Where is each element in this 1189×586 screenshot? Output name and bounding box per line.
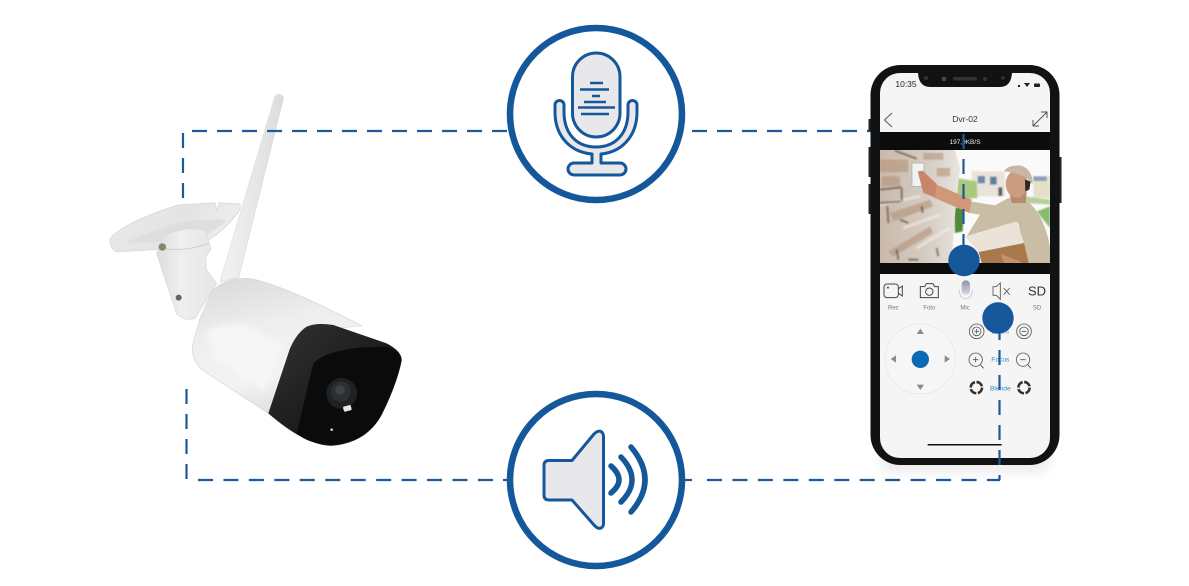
smartphone	[868, 65, 1062, 480]
neck	[1009, 191, 1027, 203]
face	[1006, 170, 1028, 198]
dashed connector lines	[183, 131, 1000, 480]
icon: record	[884, 284, 902, 298]
garden greenery	[954, 178, 1050, 233]
infrared dot	[330, 428, 333, 431]
SD label: SD	[1028, 284, 1046, 299]
camera bracket	[110, 203, 240, 319]
fullscreen icon	[1033, 112, 1047, 126]
icon: microphone	[555, 53, 637, 175]
icon: speaker	[544, 431, 645, 528]
video photo: delivery man at door	[880, 150, 1050, 263]
blue marker on controls	[982, 302, 1014, 334]
control labels: Focus	[991, 357, 1010, 364]
zoom buttons	[969, 324, 1031, 339]
phone shadow	[880, 450, 1050, 472]
app back arrow	[884, 113, 892, 127]
mounting plate	[110, 203, 240, 252]
aperture buttons	[971, 382, 1030, 393]
control labels: Blende	[990, 385, 1011, 392]
blue marker on video	[948, 245, 980, 276]
plate underside	[125, 219, 227, 243]
icon: photo	[920, 284, 938, 298]
speaker badge	[510, 394, 682, 566]
phone frame	[870, 65, 1060, 465]
bracket screw top	[158, 243, 166, 251]
microphone badge	[510, 28, 682, 200]
security camera photo	[110, 94, 402, 446]
phone dashed line vertical top	[962, 134, 965, 250]
app title: Dvr-02	[952, 114, 978, 124]
arm	[933, 184, 972, 213]
focus buttons	[969, 353, 1031, 368]
bracket neck	[157, 229, 217, 319]
side buttons	[868, 119, 1062, 214]
shirt	[966, 198, 1050, 263]
body highlight	[207, 324, 283, 392]
bracket screw lower	[176, 295, 182, 301]
status bar icons	[1018, 83, 1040, 87]
icon captions: Mic	[960, 306, 970, 312]
icon: muted speaker	[993, 283, 1010, 299]
icon captions: Foto	[923, 306, 936, 312]
hair	[1025, 180, 1031, 191]
control labels: Zoom	[992, 329, 1009, 336]
status bar time: 10:35	[895, 79, 917, 89]
control labels	[990, 329, 1011, 392]
phone dashed line vertical bottom	[998, 325, 1001, 480]
notch	[918, 73, 1012, 87]
speed readout: 197,9KB/S	[949, 139, 981, 146]
camera antenna	[220, 94, 284, 282]
camera lens	[326, 378, 357, 412]
parcel box	[965, 221, 1029, 263]
infographic canvas	[110, 24, 1062, 570]
home indicator	[928, 444, 1002, 445]
camera body	[192, 278, 362, 413]
cap	[1004, 165, 1033, 184]
neck collar line	[158, 243, 209, 250]
icon captions: Rec	[888, 306, 899, 312]
hand	[918, 171, 937, 197]
icon captions	[888, 306, 1042, 312]
distant houses	[972, 171, 1050, 198]
icon: mic active	[959, 280, 973, 299]
phone screen	[880, 73, 1050, 458]
joystick	[885, 324, 955, 394]
icon captions: SD	[1033, 306, 1042, 312]
video black band	[880, 132, 1050, 274]
camera black front housing	[268, 324, 402, 446]
door bell plate	[912, 163, 924, 186]
camera inner face	[297, 347, 401, 444]
delivery man	[918, 165, 1050, 263]
brick wall	[880, 150, 960, 263]
control icon row	[884, 280, 1046, 445]
